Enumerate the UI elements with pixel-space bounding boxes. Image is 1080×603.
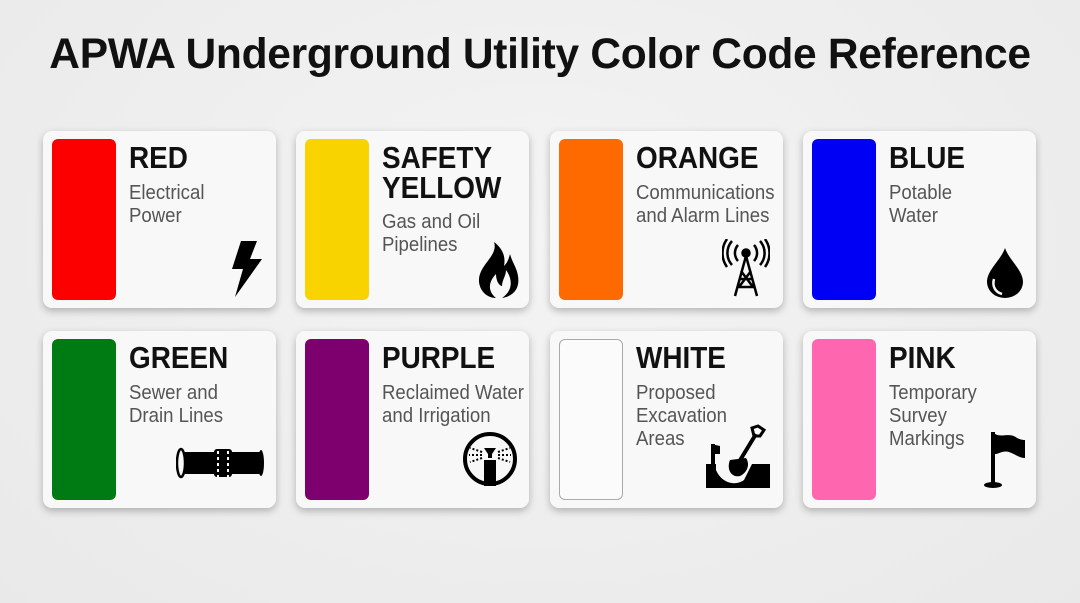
panel: blue	[803, 131, 1036, 308]
text: potable water	[889, 182, 952, 227]
heading: blue: BLUE	[889, 140, 965, 175]
heading: pink: PINK	[889, 340, 956, 375]
panel: pink	[803, 331, 1036, 508]
heading: green: GREEN	[129, 340, 228, 375]
text: gas and oil: Gas and Oil	[382, 211, 480, 233]
text: temporary survey	[889, 382, 977, 450]
panel: purple	[296, 331, 529, 508]
swatch: white	[559, 339, 623, 500]
text: communications: Communications	[636, 182, 775, 204]
panel: white	[550, 331, 783, 508]
swatch: green	[52, 339, 116, 500]
swatch: red	[52, 139, 116, 300]
icon: lightning	[232, 241, 262, 297]
text: gas and oil: Pipelines	[382, 234, 457, 256]
text: potable water: Water	[889, 205, 938, 227]
icon: sprinkler	[463, 432, 517, 486]
text: reclaimed water: and Irrigation	[382, 405, 491, 427]
title: APWA Underground Utility Color Code Reference	[49, 31, 1031, 78]
swatch: purple	[305, 339, 369, 500]
text: temporary survey: Temporary	[889, 382, 977, 404]
panel: red	[43, 131, 276, 308]
icon: flame	[478, 242, 518, 298]
text: sewer: Drain Lines	[129, 405, 223, 427]
text: electrical power: Electrical	[129, 182, 204, 204]
text: proposed excavation: Proposed	[636, 382, 716, 404]
icon: flag	[984, 432, 1025, 488]
text: proposed excavation	[636, 382, 727, 450]
heading: safety yellow: SAFETY	[382, 140, 492, 175]
heading: safety yellow	[382, 140, 502, 205]
swatch: yellow	[305, 139, 369, 300]
panel: green	[43, 331, 276, 508]
panel: safety yellow	[296, 131, 529, 308]
swatch: orange	[559, 139, 623, 300]
text: proposed excavation: Excavation	[636, 405, 727, 427]
icon: water drop	[987, 248, 1023, 298]
text: communications	[636, 182, 775, 227]
text: reclaimed water	[382, 382, 524, 427]
text: proposed excavation: Areas	[636, 428, 685, 450]
swatch: pink	[812, 339, 876, 500]
text: gas and oil	[382, 211, 480, 256]
text: temporary survey: Survey	[889, 405, 947, 427]
text: reclaimed water: Reclaimed Water	[382, 382, 524, 404]
text: potable water: Potable	[889, 182, 952, 204]
heading: purple: PURPLE	[382, 340, 495, 375]
icon: pipe	[176, 448, 264, 478]
text: sewer	[129, 382, 223, 427]
icon: radio tower	[722, 239, 770, 296]
panel: orange	[550, 131, 783, 308]
heading: red: RED	[129, 140, 188, 175]
heading: orange: ORANGE	[636, 140, 758, 175]
swatch: blue	[812, 139, 876, 300]
text: electrical power: Power	[129, 205, 182, 227]
heading: white: WHITE	[636, 340, 726, 375]
text: electrical power	[129, 182, 204, 227]
text: sewer: Sewer and	[129, 382, 218, 404]
icon: shovel	[706, 424, 770, 488]
text: temporary survey: Markings	[889, 428, 964, 450]
heading: safety yellow: YELLOW	[382, 170, 501, 205]
text: communications: and Alarm Lines	[636, 205, 769, 227]
